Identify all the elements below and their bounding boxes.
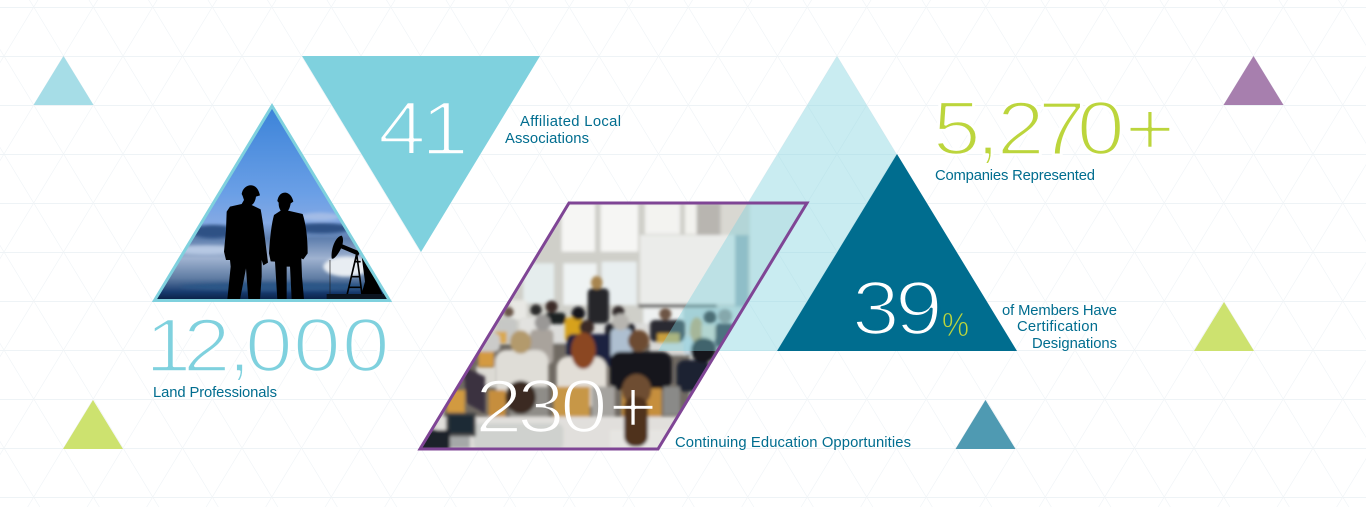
label: Affiliated Local Associations: Affiliated Local xyxy=(520,114,621,130)
decorative triangle: bottom left green xyxy=(63,400,123,449)
icon: oil pump jack xyxy=(327,236,390,299)
label: Affiliated Local Associations xyxy=(505,114,621,147)
panel: classroom photo in parallelogram xyxy=(422,204,804,448)
label: Companies Represented: Companies Represented xyxy=(935,168,1095,184)
label: of Members Have Certification Designations: Designations xyxy=(1032,336,1117,352)
decorative triangle: right green xyxy=(1194,302,1254,351)
stat: 5,270+ companies represented xyxy=(933,87,1175,184)
panel: oil field workers photo triangle xyxy=(150,104,394,302)
number: 5,270+: 5,270+ xyxy=(933,87,1175,171)
decorative triangle: top left light teal xyxy=(34,56,94,105)
number: 12,000: 12,000 xyxy=(145,304,390,388)
number: 230+: 230+ xyxy=(475,365,658,449)
number: 39: 39 xyxy=(852,267,943,351)
stat: 41 affiliated local associations xyxy=(378,87,621,171)
stat: 230+ continuing education opportunities xyxy=(480,380,910,450)
percent sign: % xyxy=(942,306,969,343)
icon: worker silhouette left xyxy=(224,185,268,299)
presenter xyxy=(588,288,609,323)
panel: purple parallelogram frame xyxy=(420,203,807,449)
number: 41: 41 xyxy=(378,87,469,171)
label: Land Professionals: Land Professionals xyxy=(153,385,277,401)
second row xyxy=(477,333,500,352)
panel: medium teal inverted triangle xyxy=(302,56,540,252)
chairs xyxy=(495,332,507,343)
panel: dark teal triangle xyxy=(777,154,1017,351)
back row xyxy=(497,318,517,343)
label: Affiliated Local Associations: Associations xyxy=(505,131,589,147)
decorative triangle: top right purple xyxy=(1224,56,1284,105)
label: of Members Have Certification Designations xyxy=(1002,303,1117,352)
front row heads xyxy=(505,381,536,414)
stat: 39% of members have certification designations xyxy=(852,267,1117,352)
icon: worker silhouette right xyxy=(269,193,308,299)
sky clouds xyxy=(184,212,364,291)
decorative triangle: bottom teal xyxy=(956,400,1016,449)
label: of Members Have Certification Designations: Certification xyxy=(1017,319,1098,335)
label: Continuing Education Opportunities: Continuing Education Opportunities xyxy=(675,435,911,451)
table xyxy=(437,417,683,450)
label: of Members Have Certification Designations: of Members Have xyxy=(1002,303,1117,319)
stat: 12,000 land professionals xyxy=(145,304,390,401)
panel: light teal background triangle xyxy=(658,56,1016,351)
